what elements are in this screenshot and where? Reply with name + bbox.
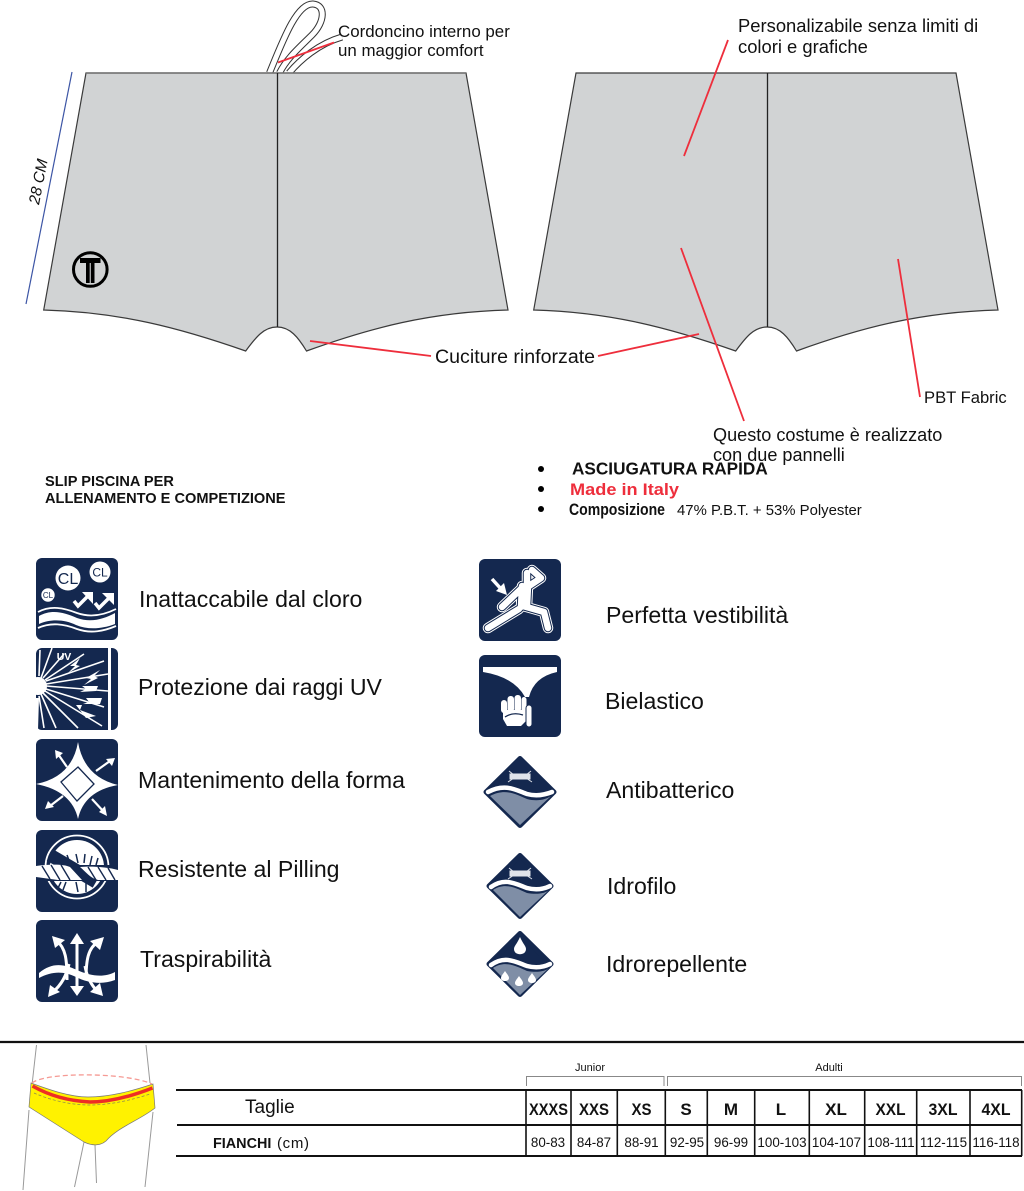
size headers	[529, 1100, 1010, 1119]
icon: shape retention	[36, 739, 118, 821]
icon: UV: UV	[57, 651, 71, 663]
icon: fit	[479, 559, 561, 641]
size headers: XXL	[876, 1100, 906, 1119]
callout lines	[278, 40, 920, 421]
feature labels right: Bielastico	[605, 688, 704, 714]
icon: water repellent	[489, 934, 551, 995]
size headers: S	[680, 1100, 692, 1119]
feature labels right	[605, 602, 788, 977]
size headers: 4XL	[982, 1100, 1010, 1119]
product title: SLIP PISCINA PER	[45, 474, 174, 490]
icon: pilling	[36, 830, 118, 912]
row label: sizes: Taglie	[245, 1097, 295, 1118]
feature labels left: Mantenimento della forma	[138, 767, 405, 793]
icon: bi-elastic	[479, 655, 561, 737]
row label: hips	[213, 1135, 309, 1152]
bullet list: 47% P.B.T. + 53% Polyester	[677, 503, 862, 519]
table grid	[176, 1090, 1022, 1156]
hip values: 104-107	[812, 1135, 861, 1150]
hip values: 88-91	[624, 1135, 659, 1150]
row label: hips: FIANCHI	[213, 1136, 271, 1152]
size headers: M	[724, 1100, 738, 1119]
icon: hydrophilic	[489, 856, 551, 917]
hip values: 96-99	[714, 1135, 748, 1150]
callout: cord: Cordoncino interno per	[338, 22, 510, 41]
back shorts panel	[534, 73, 998, 351]
age group brackets: Adulti	[815, 1062, 843, 1074]
size headers: XXS	[579, 1100, 609, 1119]
product title: ALLENAMENTO E COMPETIZIONE	[45, 491, 286, 507]
callout: panels: con due pannelli	[713, 445, 845, 465]
icon: chlorine	[36, 558, 118, 640]
callout: stitching: Cuciture rinforzate	[435, 346, 595, 368]
size headers: XL	[825, 1100, 847, 1119]
hip values	[531, 1135, 1020, 1150]
callout: cord: un maggior comfort	[338, 41, 484, 60]
age group brackets	[526, 1062, 1022, 1086]
logo	[74, 253, 107, 286]
hip values: 84-87	[577, 1135, 611, 1150]
feature labels left: Resistente al Pilling	[138, 856, 340, 882]
bullet list: ASCIUGATURA RAPIDA	[572, 458, 768, 478]
size headers: 3XL	[928, 1100, 958, 1119]
hip values: 100-103	[757, 1135, 807, 1150]
size table	[176, 1062, 1022, 1156]
front shorts panel	[44, 73, 508, 351]
callout: customisable: Personalizabile senza limiti di	[738, 15, 978, 36]
bullet list	[538, 458, 862, 519]
size figure	[23, 1045, 155, 1190]
feature labels right: Antibatterico	[606, 777, 734, 803]
age group brackets: Junior	[575, 1062, 605, 1074]
icon: chlorine: CL	[58, 571, 78, 588]
hip values: 112-115	[920, 1135, 967, 1150]
feature labels left: Traspirabilità	[140, 946, 271, 972]
drawstring cord	[270, 4, 342, 73]
section divider	[0, 1041, 1024, 1043]
icon: chlorine: CL	[92, 566, 108, 580]
size headers: L	[776, 1100, 786, 1119]
feature labels left	[138, 586, 405, 972]
feature labels left: Protezione dai raggi UV	[138, 674, 383, 700]
feature labels right: Perfetta vestibilità	[606, 602, 788, 628]
icon: antibacterial	[486, 758, 554, 826]
icon: UV	[29, 648, 118, 730]
bullet list: Made in Italy	[570, 481, 680, 499]
bullet list: Composizione	[569, 501, 665, 519]
feature labels left: Inattaccabile dal cloro	[139, 586, 362, 612]
callout: fabric: PBT Fabric	[924, 388, 1007, 407]
hip values: 108-111	[867, 1135, 915, 1150]
callout: customisable: colori e grafiche	[738, 36, 868, 57]
callout: panels: Questo costume è realizzato	[713, 425, 942, 445]
hip values: 116-118	[972, 1135, 1020, 1150]
icon: chlorine: CL	[43, 591, 54, 600]
hip values: 80-83	[531, 1135, 565, 1150]
feature labels right: Idrofilo	[607, 873, 676, 899]
hip values: 92-95	[670, 1135, 704, 1150]
icon: breathability	[36, 920, 118, 1002]
size headers: XS	[632, 1100, 652, 1119]
measure label: 28 CM	[26, 158, 52, 207]
row label: hips: (cm)	[277, 1135, 309, 1152]
size headers: XXXS	[529, 1100, 568, 1119]
feature labels right: Idrorepellente	[606, 951, 747, 977]
measure line	[26, 72, 72, 304]
